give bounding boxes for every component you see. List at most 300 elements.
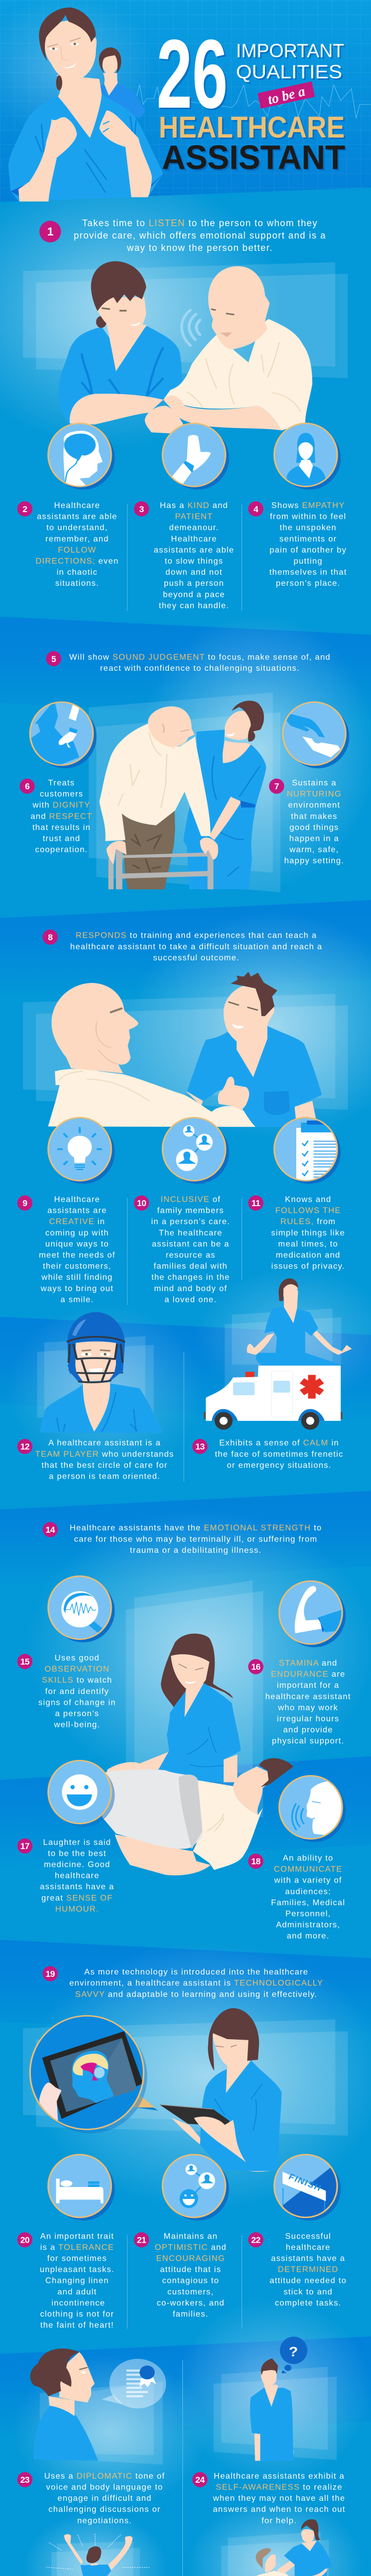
quality 7: Sustains a (292, 779, 336, 787)
quality 10: families deal with (154, 1262, 228, 1271)
quality 11: simple things like (271, 1229, 345, 1238)
quality 16: who may work (278, 1703, 338, 1712)
quality 23: voice and body language to (46, 2483, 163, 2492)
quality 12: TEAM PLAYER who understands (35, 1450, 174, 1459)
quality 10: the changes in the (151, 1273, 230, 1282)
illustration: nurse supporting man with walker (89, 692, 280, 892)
quality 11: Knows and (285, 1195, 331, 1204)
icon: finish banner circle (quality 22): FINISH (287, 2172, 324, 2193)
quality 10: The healthcare (159, 1229, 223, 1238)
quality 6: trust and (43, 835, 80, 843)
tablet (160, 2105, 229, 2126)
badge 10: 10 (137, 1198, 146, 1208)
badge 6: 6 (25, 782, 29, 791)
quality 20: and adult (57, 2287, 97, 2296)
quality 3: Has a KIND and (160, 501, 228, 510)
quality 7: NURTURING (287, 790, 342, 799)
quality 7: environment (288, 801, 340, 810)
illustration: nurse pushing wheelchair (221, 2519, 332, 2576)
illustration: male carer giving thumbs up to patient (23, 972, 348, 1127)
quality 7: happy setting. (284, 857, 344, 866)
quality 9: their customers, (43, 1262, 111, 1271)
quality 13: or emergency situations. (227, 1461, 331, 1470)
thought bubble (280, 2337, 308, 2374)
quality 3: PATIENT (175, 513, 213, 521)
quality 11: FOLLOWS THE (275, 1207, 341, 1215)
nurse (183, 701, 266, 889)
quality 12: a person is team oriented. (49, 1472, 160, 1481)
quality 19: environment, a healthcare assistant is TECHNOLOGICALLY (70, 1979, 323, 1988)
patient in wheelchair (231, 2548, 296, 2576)
quality 22: attitude needed to (269, 2277, 347, 2285)
badge 1: 1 (47, 225, 54, 238)
badge 12 (18, 1439, 32, 1454)
quality 10: a loved one. (164, 1295, 217, 1304)
quality 12: that the best circle of care for (42, 1461, 167, 1470)
quality 17: to be the best (48, 1850, 107, 1858)
quality 9: Healthcare (54, 1195, 100, 1204)
quality 22: stick to and (283, 2287, 333, 2296)
quality 18: audiences: (285, 1887, 331, 1896)
quality 9 (18, 1195, 115, 1304)
badge 3: 3 (139, 504, 144, 514)
quality 3: Healthcare (171, 535, 217, 544)
quality 21: families. (173, 2310, 209, 2318)
icon: finish banner circle (quality 22) (273, 2155, 341, 2221)
badge 19 (43, 1966, 58, 1981)
quality 3: demeanour. (169, 523, 219, 532)
badge 8 (43, 929, 58, 945)
section band: qualities 12 and 13 (0, 1317, 371, 1422)
quality 10: mind and body of (154, 1284, 227, 1293)
quality 2: situations. (55, 579, 99, 588)
quality 24: when they may not have all the (213, 2494, 345, 2503)
badge 24: 24 (195, 2475, 205, 2485)
quality 17: HUMOUR. (55, 1905, 99, 1913)
quality 9: ways to bring out (40, 1284, 113, 1293)
header panel (0, 0, 371, 202)
illustration: nurse listening to patient (23, 261, 348, 433)
walker (108, 848, 213, 889)
quality 6: that results in (32, 823, 91, 832)
sound waves (181, 310, 200, 346)
quality 17: Laughter is said (43, 1838, 111, 1847)
quality 4: pain of another by (269, 546, 347, 554)
quality 20: An important trait (40, 2232, 114, 2241)
patient (48, 983, 256, 1127)
quality 17: medicine. Good (44, 1860, 110, 1869)
quality 18 (248, 1854, 345, 1941)
quality 22: healthcare (286, 2243, 330, 2252)
quality 20: unpleasant tasks. (40, 2265, 114, 2274)
nurse (59, 261, 182, 426)
quality 9: unique ways to (45, 1240, 109, 1248)
main nurse scrubs (8, 95, 163, 201)
quality 2 (18, 501, 119, 588)
quality 4: Shows EMPATHY (271, 501, 345, 510)
quality 11: issues of privacy. (271, 1262, 345, 1271)
icon: caring hands circle (quality 7) (283, 702, 349, 768)
section band: qualities 23 to 26 (0, 2336, 371, 2439)
quality 3: down and not (165, 568, 223, 577)
quality 12 (18, 1439, 174, 1481)
quality 3 (134, 501, 234, 610)
quality 17: great SENSE OF (41, 1894, 113, 1903)
badge 19: 19 (46, 1969, 55, 1979)
title line: healthcare: HEALTHCARE (159, 111, 345, 144)
quality 15: well-being. (54, 1721, 100, 1730)
quality 9: meet the needs of (39, 1251, 115, 1260)
patient (70, 266, 312, 433)
quality 11: RULES, from (280, 1217, 336, 1226)
quality 16: important for a (277, 1681, 340, 1690)
quality 2: in chaotic (57, 568, 97, 577)
speech bubble with certificate (102, 2359, 166, 2409)
quality 9: while still finding (41, 1273, 113, 1282)
quality 5: Will show SOUND JUDGEMENT to focus, make sense of, and (69, 653, 331, 662)
illustration: nurse with tablet and brain scan bubble (23, 2008, 348, 2172)
quality 2: DIRECTIONS; even (36, 557, 119, 566)
badge 22: 22 (251, 2235, 260, 2245)
badge 21 (134, 2232, 149, 2247)
carer (185, 972, 322, 1127)
quality 4: from within to feel (270, 513, 346, 521)
thought bubble: ? (289, 2344, 298, 2359)
quality 20: the faint of heart! (40, 2321, 114, 2330)
quality 1 text: provide care, which offers emotional support and is a (74, 230, 326, 241)
badge 8: 8 (48, 933, 53, 942)
illustration: woman celebrating with raised arms (43, 2534, 151, 2576)
badge 20 (18, 2232, 32, 2247)
illustration: nurse caring for patient in bed (102, 1581, 293, 1875)
icon: gloved hand circle (quality 6) (28, 700, 96, 768)
quality 9: assistants are (47, 1207, 107, 1215)
quality 3: beyond a pace (163, 590, 225, 599)
background nurse (97, 47, 145, 118)
badge 1 (39, 221, 61, 242)
quality 22 (248, 2232, 347, 2308)
quality 3: assistants are able (154, 546, 234, 554)
quality 6: customers (40, 790, 83, 799)
quality 1 text (39, 218, 326, 253)
quality 16: irregular hours (277, 1715, 340, 1723)
badge 22 (248, 2232, 263, 2247)
quality 23: challenging discussions or (48, 2505, 161, 2514)
quality 18: Personnel, (285, 1909, 331, 1919)
quality 18: with a variety of (274, 1876, 342, 1885)
quality 22: assistants have a (271, 2255, 345, 2263)
icon: raised hand circle (quality 3) (162, 423, 229, 489)
icon: family network circle (quality 10) (162, 1117, 229, 1184)
badge 10 (134, 1195, 149, 1211)
quality 15: SKILLS to watch (42, 1676, 112, 1685)
meditating nurse (247, 1278, 352, 1367)
quality 22: Successful (285, 2232, 331, 2241)
quality 10: assistant can be a (152, 1240, 229, 1248)
quality 15: for and identify (45, 1687, 109, 1696)
quality 2: remember, and (45, 535, 109, 544)
quality 5 (46, 651, 331, 673)
badge 17: 17 (20, 1841, 29, 1851)
badge 16: 16 (251, 1662, 260, 1672)
quality 14 (43, 1522, 322, 1555)
quality 8: RESPONDS to training and experiences that can teach a (76, 931, 317, 940)
quality 23: engage in difficult and (58, 2494, 151, 2503)
badge 23 (18, 2472, 32, 2487)
badge 14 (43, 1522, 58, 1537)
quality 10 (134, 1195, 230, 1304)
star of life (302, 1375, 322, 1399)
quality 7 (269, 778, 344, 866)
quality 7: warm, safe, (289, 845, 339, 854)
quality 3: they can handle. (159, 601, 229, 610)
badge 2: 2 (23, 504, 27, 514)
quality 24: Healthcare assistants exhibit a (214, 2472, 345, 2481)
thumbs up hand (218, 1077, 249, 1111)
quality 4: the unspoken (280, 523, 336, 532)
quality 16: and provide (283, 1726, 333, 1735)
patient (99, 706, 211, 889)
quality 9: coming up with (45, 1229, 109, 1238)
nurse (160, 2008, 281, 2172)
header nurse illustration (8, 7, 164, 201)
quality 15: Uses good (55, 1654, 99, 1663)
badge 4 (248, 501, 263, 516)
quality 24: for help. (261, 2516, 297, 2525)
title line: assistant: ASSISTANT (162, 138, 345, 176)
quality 3: push a person (164, 579, 224, 588)
quality 6: with DIGNITY (32, 801, 91, 810)
badge 11 (248, 1195, 263, 1211)
badge 5 (46, 651, 61, 666)
quality 20: clothing is not for (40, 2310, 114, 2318)
quality 21: Maintains an (163, 2232, 218, 2241)
quality 18: COMMUNICATE (274, 1865, 342, 1874)
quality 11: meal times, to (278, 1240, 338, 1248)
quality 13: the face of sometimes frenetic (215, 1450, 344, 1459)
quality 1 text: way to know the person better. (126, 243, 273, 253)
quality 19: SAVVY and adaptable to learning and using it effectively. (75, 1990, 317, 1999)
icon: laughing face circle (quality 17) (48, 1760, 115, 1827)
quality 21: OPTIMISTIC and (155, 2243, 227, 2252)
badge 7: 7 (274, 782, 279, 791)
icon: speaking head circle (quality 18) (279, 1776, 346, 1842)
quality 19 (43, 1966, 323, 1999)
badge 24 (192, 2472, 208, 2487)
quality 10: resource as (166, 1251, 215, 1260)
quality 10: family members (157, 1207, 224, 1215)
quality 21 (134, 2232, 227, 2318)
title (157, 20, 345, 176)
quality 14: Healthcare assistants have the EMOTIONAL STRENGTH to (70, 1524, 322, 1533)
quality 2: Healthcare (54, 501, 100, 510)
to be a banner: to be a (266, 83, 307, 107)
badge 9 (18, 1195, 32, 1211)
icon: person circle (quality 4) (274, 423, 341, 489)
badge 23: 23 (20, 2475, 29, 2485)
badge 20: 20 (20, 2235, 29, 2245)
quality 16: ENDURANCE are (271, 1670, 345, 1679)
left arm and fist (19, 117, 77, 201)
quality 18: Administrators, (276, 1921, 340, 1929)
quality 2: assistants are able (37, 513, 117, 521)
quality 3: to slow things (165, 557, 223, 566)
badge 18 (248, 1854, 263, 1869)
quality 20: is a TOLERANCE (40, 2243, 114, 2252)
to be a banner (258, 81, 315, 109)
quality 7: that makes (291, 812, 338, 821)
quality 24: SELF-AWARENESS to realize (216, 2483, 343, 2492)
quality 5: react with confidence to challenging situations. (100, 664, 300, 673)
quality 22: DETERMINED (278, 2265, 339, 2274)
quality 6: and RESPECT (30, 812, 92, 821)
quality 17 (18, 1838, 114, 1913)
quality 20: incontinence (52, 2299, 105, 2308)
icon: strong arm circle (quality 16) (279, 1581, 346, 1647)
quality 16: healthcare assistant (265, 1692, 351, 1701)
title line: qualities: QUALITIES (236, 61, 342, 82)
quality 1 text: Takes time to LISTEN to the person to whom they (82, 218, 318, 228)
quality 23 (18, 2472, 165, 2525)
quality 10: in a person’s care. (151, 1217, 230, 1226)
badge 14: 14 (46, 1525, 55, 1535)
nurse (277, 2519, 332, 2576)
quality 15: signs of change in (38, 1698, 116, 1707)
badge 9: 9 (23, 1198, 27, 1208)
quality 20 (18, 2232, 114, 2330)
quality 12: A healthcare assistant is a (48, 1439, 161, 1448)
quality 19: As more technology is introduced into the healthcare (84, 1968, 309, 1977)
quality 8 (43, 929, 323, 962)
badge 15 (18, 1654, 32, 1669)
quality 16: physical support. (272, 1737, 344, 1745)
quality 15 (18, 1654, 116, 1730)
badge 13 (192, 1439, 208, 1454)
quality 9: a smile. (60, 1295, 94, 1304)
quality 24 (192, 2472, 345, 2525)
quality 4 (248, 501, 347, 588)
man (250, 2359, 295, 2462)
badge 18: 18 (251, 1857, 260, 1866)
quality 9: CREATIVE in (49, 1217, 105, 1226)
quality 18: An ability to (283, 1854, 333, 1863)
quality 18: Families, Medical (271, 1899, 345, 1907)
quality 13 (192, 1439, 344, 1470)
arms joined (70, 394, 163, 425)
quality 16: STAMINA and (279, 1659, 338, 1668)
right arm and fist (99, 110, 152, 197)
quality 20: Changing linen (45, 2277, 109, 2285)
quality 21: ENCOURAGING (156, 2255, 225, 2263)
quality 15: a person’s (55, 1709, 99, 1718)
quality 23: negotiations. (77, 2516, 132, 2525)
quality 23: Uses a DIPLOMATIC tone of (44, 2472, 165, 2481)
quality 14: care for those who may be terminally ill, or suffering from (74, 1535, 317, 1544)
illustration: diplomatic nurse with speech bubble (30, 2348, 166, 2465)
quality 18: and more. (287, 1932, 329, 1941)
big number 26: 26 (157, 20, 228, 129)
quality 20: for sometimes (47, 2255, 107, 2263)
quality 2: to understand, (46, 523, 108, 532)
ecg line (136, 85, 371, 118)
icon: light bulb circle (quality 9) (48, 1117, 115, 1184)
badge 7 (269, 778, 284, 794)
badge 16 (248, 1659, 263, 1674)
section band: qualities 8 to 11 (0, 900, 371, 997)
icon: bed circle (quality 20) (48, 2155, 115, 2221)
celebration dashes (43, 2534, 151, 2576)
icon: clipboard checklist circle (quality 11) (274, 1117, 341, 1184)
icon: optimism network circle (quality 21) (162, 2155, 229, 2221)
title line: important: IMPORTANT (236, 40, 344, 61)
illustration: team player with football helmet (37, 1312, 163, 1433)
quality 21: co-workers, and (157, 2299, 225, 2308)
patient in bed (102, 1758, 293, 1875)
quality 22: complete tasks. (275, 2299, 342, 2308)
badge 11: 11 (251, 1198, 260, 1208)
badge 5: 5 (52, 654, 56, 664)
illustration: calm nurse meditating on ambulance (204, 1278, 352, 1430)
nurse (107, 1634, 241, 1782)
quality 4: putting (294, 557, 323, 566)
quality 10: INCLUSIVE of (161, 1195, 221, 1204)
quality 8: healthcare assistant to take a difficult situation and reach a (70, 942, 323, 951)
quality 6 (20, 778, 92, 854)
icon: brain circle (quality 2) (48, 423, 115, 489)
quality 21: contagious to (162, 2277, 219, 2285)
quality 6: Treats (48, 779, 75, 787)
nurse profile (30, 2348, 98, 2461)
section band: qualities 17 and 18 (0, 1756, 371, 1868)
quality 17: healthcare (55, 1872, 99, 1880)
brain scan speech bubble (30, 2016, 158, 2133)
section band: qualities 5 to 7 (0, 617, 371, 721)
ambulance (204, 1366, 343, 1430)
badge 13: 13 (195, 1442, 205, 1452)
quality 11 (248, 1195, 345, 1271)
quality 16 (248, 1659, 351, 1745)
section band: qualities 19 to 22 (0, 1940, 371, 2040)
quality 21: customers, (167, 2287, 214, 2296)
quality 17: assistants have a (40, 1883, 114, 1891)
quality 13: Exhibits a sense of CALM in (220, 1439, 339, 1448)
badge 12: 12 (20, 1442, 29, 1452)
quality 8: successful outcome. (153, 954, 240, 962)
quality 6: cooperation. (35, 845, 88, 854)
badge 21: 21 (137, 2235, 146, 2245)
badge 3 (134, 501, 149, 516)
badge 4: 4 (254, 504, 259, 514)
quality 4: person’s place. (276, 579, 341, 588)
badge 2 (18, 501, 32, 516)
badge 6 (20, 778, 35, 794)
quality 15: OBSERVATION (45, 1665, 110, 1674)
badge 17 (18, 1838, 32, 1854)
quality 4: sentiments or (279, 535, 337, 544)
quality 24: answers and when to reach out (213, 2505, 345, 2514)
quality 7: good things (290, 823, 339, 832)
quality 2: FOLLOW (58, 546, 96, 554)
badge 15: 15 (20, 1657, 29, 1667)
illustration: self-aware man with thought bubble (214, 2337, 336, 2462)
section band: qualities 14 to 16 (0, 1491, 371, 1585)
quality 7: happen in a (289, 835, 339, 843)
icon: magnifier circle (quality 15) (48, 1576, 115, 1642)
quality 11: medication and (276, 1251, 341, 1260)
quality 14: trauma or a debilitating illness. (130, 1546, 262, 1555)
quality 4: themselves in that (269, 568, 347, 577)
quality 21: attitude that is (160, 2265, 221, 2274)
